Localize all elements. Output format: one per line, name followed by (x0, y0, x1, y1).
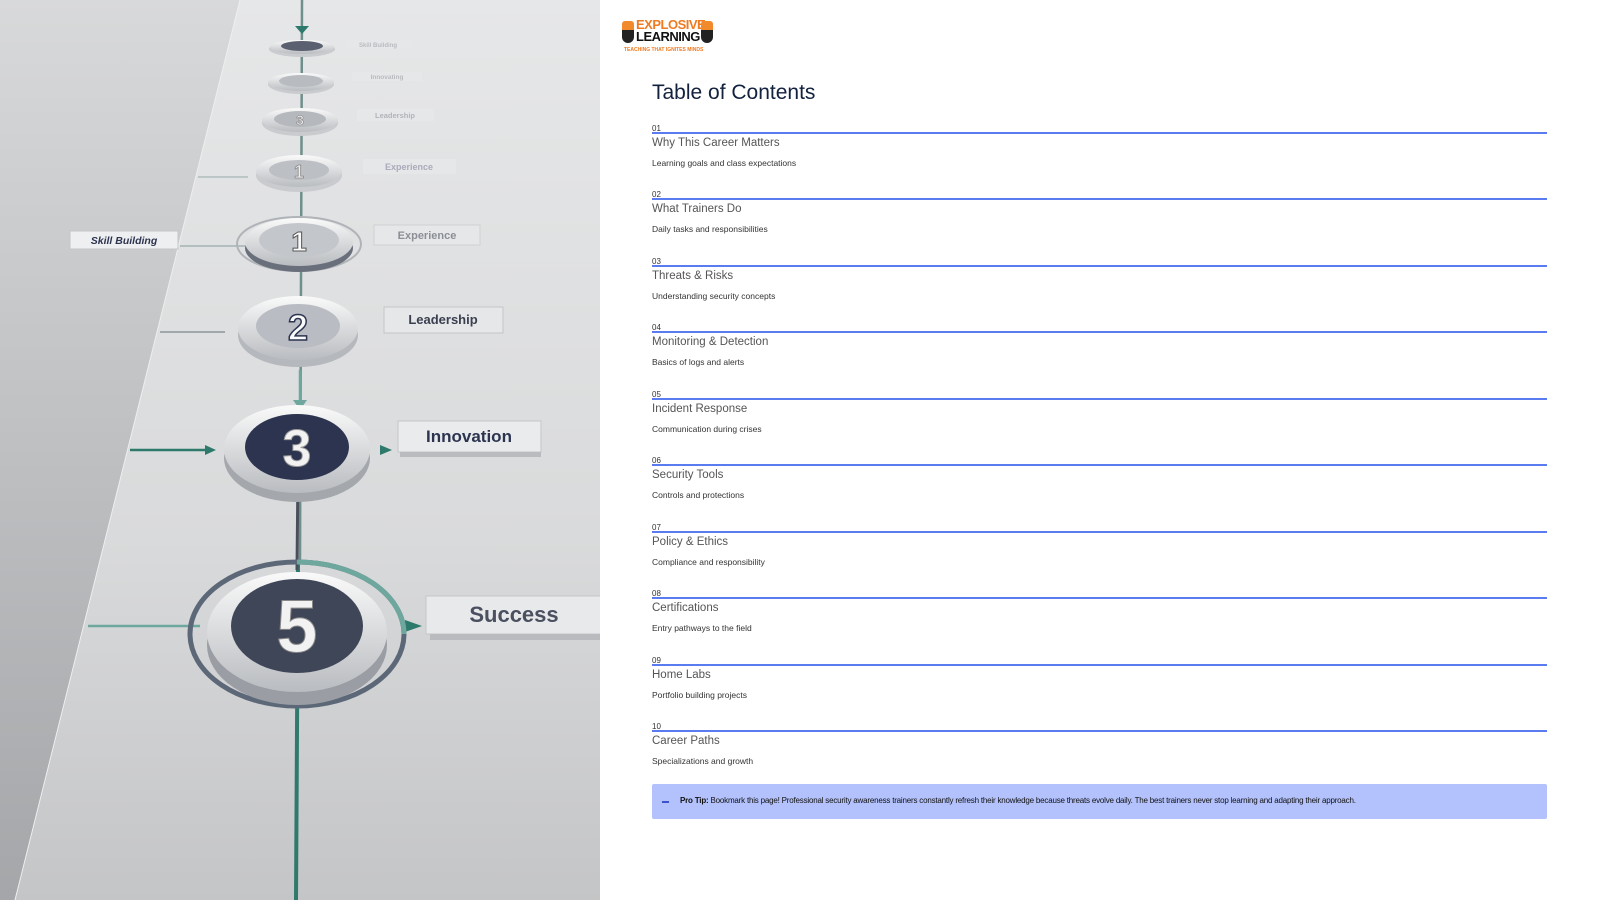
milestone 5 (190, 562, 404, 706)
labels: Experience (385, 162, 433, 172)
title: Table of Contents (652, 81, 815, 104)
toc entry 01 (652, 124, 1547, 168)
toc entry 08 (652, 589, 1547, 633)
small milestones: 1 (294, 162, 304, 182)
toc entry 09: Portfolio building projects (652, 690, 747, 700)
toc entry 02: Daily tasks and responsibilities (652, 224, 768, 234)
toc entry 08: 08 (652, 589, 661, 598)
toc entry 01: Why This Career Matters (652, 137, 780, 149)
toc entry 01: 01 (652, 124, 661, 133)
logo: LEARNING (636, 29, 700, 44)
labels: Skill Building (91, 235, 158, 247)
callout: pro tip: Pro Tip: Bookmark this page! Professional security awareness trainers constantly refresh their knowledge because threats evolve daily. The best trainers never stop learning and adapting their approach. (680, 796, 1356, 805)
toc entry 04: Monitoring & Detection (652, 336, 768, 348)
labels: Skill Building (359, 43, 397, 49)
toc entry 04: Basics of logs and alerts (652, 357, 744, 367)
toc entry 10: Career Paths (652, 735, 720, 747)
labels: Leadership (375, 111, 415, 120)
milestone 2: 2 (288, 307, 308, 348)
milestone 5: 5 (276, 585, 318, 668)
toc entry 02: 02 (652, 190, 661, 199)
toc entry 03: 03 (652, 257, 661, 266)
labels: Leadership (408, 312, 478, 327)
icon: right flame head (701, 21, 713, 43)
left image: career path timeline (0, 0, 600, 900)
toc entry 06: 06 (652, 456, 661, 465)
vertical path line (296, 0, 302, 900)
toc entry 07 (652, 523, 1547, 567)
toc entry 07: Compliance and responsibility (652, 557, 765, 567)
callout: pro tip (652, 784, 1547, 819)
toc entry 06: Security Tools (652, 469, 723, 481)
toc entry 05: Incident Response (652, 403, 747, 415)
toc entry 05 (652, 390, 1547, 434)
milestone 1 (237, 217, 361, 272)
toc entry 10 (652, 722, 1547, 766)
logo (622, 17, 713, 53)
toc entry 08: Entry pathways to the field (652, 623, 752, 633)
labels: Success (469, 602, 559, 627)
toc entry 03 (652, 257, 1547, 301)
toc entry 04 (652, 323, 1547, 367)
labels (70, 40, 602, 640)
toc entry 02: What Trainers Do (652, 203, 741, 215)
logo: EXPLOSIVE (636, 17, 705, 32)
toc entry 07: 07 (652, 523, 661, 532)
toc entry 05: Communication during crises (652, 424, 762, 434)
toc entry 02 (652, 190, 1547, 234)
toc entry 09 (652, 656, 1547, 700)
milestone 3 (224, 405, 370, 502)
toc entry 10: 10 (652, 722, 661, 731)
milestone 1: 1 (291, 226, 307, 257)
toc entry 06 (652, 456, 1547, 500)
toc entry 05: 05 (652, 390, 661, 399)
toc entry 04: 04 (652, 323, 661, 332)
small milestones (256, 40, 342, 192)
labels: Experience (398, 230, 456, 242)
toc entry 09: 09 (652, 656, 661, 665)
small milestones: 3 (296, 112, 304, 128)
icon: left flame head (622, 21, 634, 43)
toc entry 08: Certifications (652, 602, 718, 614)
toc entry 01: Learning goals and class expectations (652, 158, 796, 168)
toc entry 03: Threats & Risks (652, 270, 733, 282)
labels: Innovation (426, 427, 512, 446)
labels: Innovating (371, 74, 403, 81)
milestone 2 (238, 296, 358, 367)
toc entry 09: Home Labs (652, 669, 711, 681)
arrows (88, 26, 422, 632)
logo: TEACHING THAT IGNITES MINDS (624, 47, 703, 53)
toc entry 07: Policy & Ethics (652, 536, 728, 548)
toc entry 10: Specializations and growth (652, 756, 753, 766)
milestone 3: 3 (283, 420, 311, 478)
toc entry 06: Controls and protections (652, 490, 744, 500)
toc entry 03: Understanding security concepts (652, 291, 775, 301)
